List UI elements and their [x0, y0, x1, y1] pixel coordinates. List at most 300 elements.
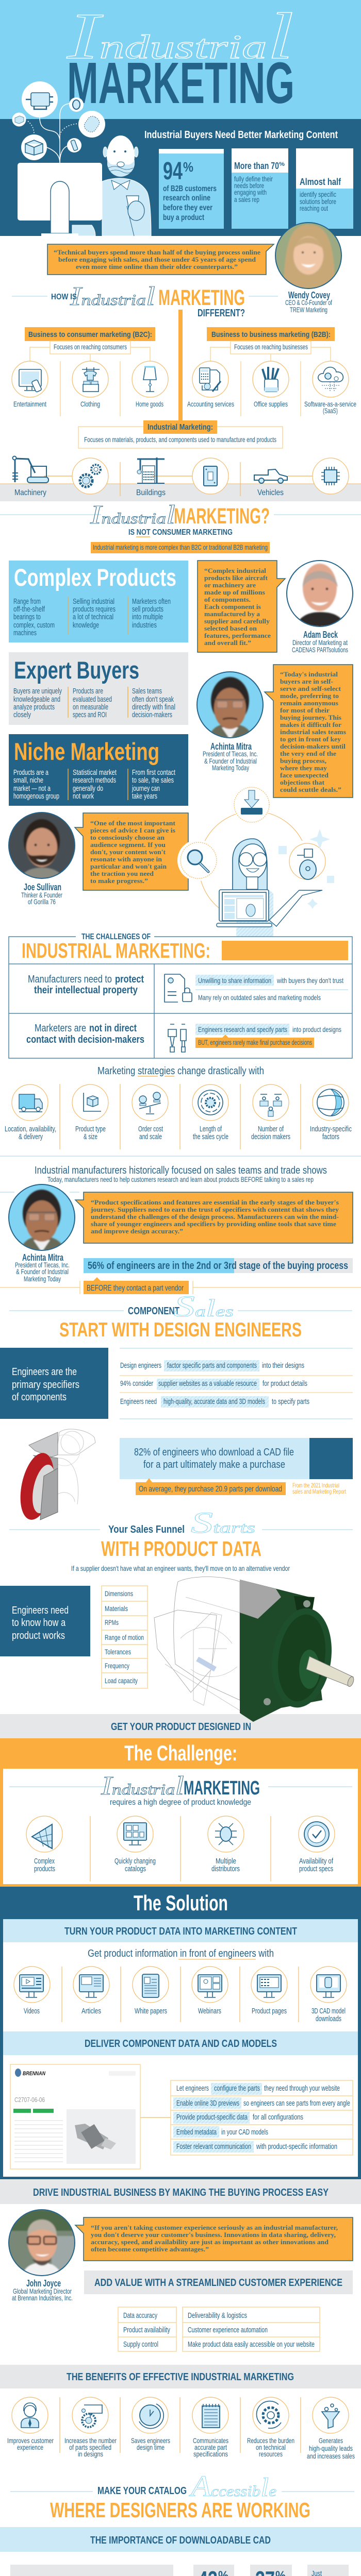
- screenshot: Brennan product page: BRENNAN: [23, 2071, 46, 2077]
- quote: Achinta Mitra: face unexpected: [280, 771, 329, 779]
- icon: buildings: [136, 457, 166, 497]
- icon: accounting: [187, 361, 234, 408]
- panel: complex products: products requires: [73, 605, 116, 614]
- list: engineer facts: high-quality, accurate data and 3D models: [163, 1397, 265, 1406]
- list: deliver features: for all configurations: [253, 2113, 303, 2122]
- heading: component sales start with design engineers: [9, 1290, 352, 1341]
- stat card: 94%: research online: [163, 194, 210, 202]
- band: get your product designed in: GET YOUR PRODUCT DESIGNED IN: [111, 1721, 251, 1733]
- stat: 82% of engineers: for a part ultimately make a purchase: [143, 1459, 285, 1470]
- caption: Achinta Mitra: Marketing Today: [212, 764, 249, 772]
- list: product specifications: [102, 1586, 147, 1688]
- caption: Achinta Mitra second: & Founder of Industrial: [16, 1267, 69, 1276]
- quote: Wendy Covey: before engaging with sales, and those under 45 years of age spend: [58, 256, 256, 263]
- icon: improves customer experience: [7, 2397, 54, 2451]
- quote: Achinta Mitra: buyers are in self-: [280, 677, 333, 685]
- icon: articles: [73, 1967, 109, 2015]
- icon: machinery: Machinery: [14, 488, 46, 497]
- caption: Wendy Covey: CEO & Co-Founder of: [285, 298, 332, 307]
- quote: Adam Beck: [198, 561, 285, 652]
- quote: John Joyce: you don't deserve your customer's business. Innovations in data sharing, delivery,: [91, 2231, 336, 2239]
- panel: B2C: Focuses on reaching consumers: [54, 343, 127, 351]
- panel: complex products: machines: [13, 629, 37, 637]
- panel: challenges of industrial marketing: [9, 933, 352, 1058]
- panel: the challenge: Availability of: [299, 1857, 334, 1866]
- quote: Achinta Mitra: makes it difficult for: [280, 721, 341, 728]
- icon: software as a service: [304, 361, 356, 415]
- caption: Achinta Mitra: [203, 741, 258, 772]
- panel: complex products: [9, 561, 188, 642]
- icon: increases parts specified: Increases the number: [64, 2436, 117, 2445]
- panel: the challenge: products: [34, 1865, 55, 1873]
- panel: the challenge: requires a high degree of product knowledge: [110, 1798, 251, 1807]
- heading: component sales start with design engineers: S ales: [174, 1290, 234, 1323]
- caption: John Joyce: John Joyce: [26, 2278, 61, 2289]
- band: the benefits: [0, 2365, 361, 2453]
- quote: Achinta Mitra second: [75, 1192, 353, 1243]
- callout: more complex: [91, 542, 270, 553]
- caption: Joe Sullivan: Joe Sullivan: [24, 882, 61, 892]
- icon: home goods: [132, 361, 168, 408]
- stat bar: 20%: [307, 2565, 349, 2576]
- quote: Achinta Mitra: buying process,: [280, 757, 326, 765]
- panel: expert buyers: Expert Buyers: [14, 656, 139, 684]
- stat card: almost half: Almost half: [300, 177, 341, 187]
- panel: challenges of industrial marketing: not in direct: [89, 1023, 137, 1034]
- icon: improves customer experience: Improves customer: [7, 2436, 54, 2445]
- list: deliver features: [171, 2080, 353, 2155]
- icon: office supplies: Office supplies: [254, 400, 288, 408]
- icon: entertainment: Entertainment: [13, 400, 46, 408]
- quote: John Joyce: “If you aren't taking customer experience seriously as an industrial manufacturer,: [91, 2224, 338, 2231]
- quote: Achinta Mitra second: understand the challenges of the design process. Manufacturers can win the mind-: [91, 1213, 339, 1221]
- panel: expert buyers: closely: [13, 710, 31, 719]
- quote: Wendy Covey: “Technical buyers spend more than half of the buying process online: [54, 248, 260, 256]
- panel: complex products: off-the-shelf: [13, 605, 45, 614]
- icon: product type and size: & size: [84, 1132, 97, 1141]
- list: deliver features: Let engineers: [176, 2084, 209, 2093]
- icon: decision makers: decision makers: [251, 1132, 290, 1141]
- icon: gears: [72, 458, 108, 494]
- panel: B2C: [25, 327, 155, 416]
- quote: Achinta Mitra second: journey. Suppliers need to earn the trust of specifiers with content that shows they: [90, 1206, 339, 1213]
- icon: order cost and scale: Order cost: [138, 1125, 163, 1133]
- panel: complex products: Marketers often: [132, 597, 171, 606]
- panel: expert buyers: on measurable: [73, 703, 108, 711]
- icon: industry-specific: [310, 1084, 352, 1141]
- icon: improves customer experience: experience: [17, 2443, 43, 2451]
- caption: Wendy Covey: Wendy Covey: [288, 290, 330, 300]
- panel: challenges of industrial marketing: THE CHALLENGES OF: [81, 933, 151, 941]
- icon: product type and size: [72, 1084, 108, 1141]
- list: engineer facts: Design engineers: [120, 1361, 161, 1370]
- heading: make your catalog accessible: MAKE YOUR CATALOG: [97, 2485, 187, 2497]
- text: historical focus: [35, 1165, 327, 1183]
- panel: expert buyers: Buyers are uniquely: [13, 687, 62, 696]
- list: deliver features: Embed metadata: [176, 2128, 217, 2137]
- panel: the challenge: Industria l: [101, 1771, 184, 1801]
- stat card: almost half: solutions before: [300, 197, 336, 206]
- icon: generates leads: [307, 2397, 355, 2460]
- list: product specifications: Tolerances: [105, 1648, 131, 1656]
- icon: communicates specifications: specifications: [193, 2450, 228, 2458]
- panel: expert buyers: analyze products: [13, 703, 55, 711]
- panel: B2B: Business to business marketing (B2B):: [211, 330, 331, 339]
- heading: How is Industrial Marketing different: HOW IS: [51, 293, 77, 301]
- icon: clothing: [72, 361, 108, 408]
- divider line: [0, 1156, 361, 1157]
- panel: niche marketing: generally do: [73, 784, 103, 793]
- caption: Adam Beck: [292, 630, 348, 654]
- caption: Joe Sullivan: Thinker & Founder: [21, 891, 62, 899]
- stat card: more than 70%: [232, 148, 288, 229]
- stat: 82% of engineers: 82% of engineers who download a CAD file: [134, 1447, 294, 1458]
- icon: communicates specifications: Communicates: [193, 2436, 228, 2445]
- heading: your sales funnel starts with product data: S tarts: [191, 1506, 255, 1539]
- stat card: more than 70%: %: [279, 161, 285, 167]
- stat card: 94%: buy a product: [163, 213, 205, 222]
- screenshot: Brennan product page: C2707-06-06: [14, 2096, 45, 2104]
- panel: expert buyers: directly with final: [132, 703, 175, 711]
- caption: Achinta Mitra: & Founder of Industrial: [204, 757, 257, 765]
- panel: niche marketing: From first contact: [132, 768, 176, 777]
- band: add value: [84, 2270, 353, 2294]
- panel: niche marketing: Statistical market: [73, 768, 117, 777]
- caption: Achinta Mitra: Achinta Mitra: [210, 741, 252, 752]
- panel: engineers need to know how a product works: to know how a: [12, 1617, 66, 1629]
- panel: niche marketing: journey can: [132, 784, 160, 793]
- panel: industrial marketing definition: [78, 420, 283, 448]
- list: deliver features: Provide product-specific data: [176, 2113, 248, 2122]
- panel: the challenge: Quickly changing: [114, 1857, 156, 1866]
- icon: order cost and scale: and scale: [139, 1132, 162, 1141]
- panel: expert buyers: evaluated based: [73, 695, 112, 704]
- list: product specifications: Range of motion: [105, 1633, 144, 1641]
- icon: chip: [313, 458, 349, 494]
- photo: Achinta Mitra second: [0, 1184, 79, 1255]
- illustration: woman with laptop and catalog icons: [177, 786, 334, 937]
- quote: Joe Sullivan: to make progress.”: [90, 877, 148, 885]
- list: product specifications: RPMs: [105, 1618, 119, 1626]
- illustration: man at computer with part icons: [12, 81, 151, 236]
- icon: entertainment: [12, 361, 48, 408]
- panel: challenges of industrial marketing: contact with decision-makers: [26, 1034, 144, 1045]
- stat card: 94%: of B2B customers: [163, 184, 217, 193]
- icon: order cost and scale: [132, 1084, 168, 1141]
- panel: the challenge: The Challenge:: [124, 1741, 237, 1765]
- caption: Achinta Mitra second: [15, 1252, 70, 1283]
- heading: component sales start with design engineers: COMPONENT: [128, 1306, 179, 1317]
- panel: engineers need to know how a product works: Engineers need: [12, 1605, 69, 1616]
- stat card: almost half: reaching out: [300, 204, 328, 212]
- list: engineer facts: supplier websites as a valuable resource: [158, 1379, 257, 1388]
- icon: videos: [14, 1967, 50, 2015]
- icon: communicates specifications: accurate part: [194, 2443, 227, 2451]
- band: importance of downloadable CAD: [0, 2527, 361, 2552]
- icon: webinars: [192, 1967, 228, 2015]
- icon: accounting: Accounting services: [187, 400, 234, 408]
- table: customer experience: Supply control: [123, 2340, 158, 2349]
- quote: Joe Sullivan: [75, 813, 188, 890]
- icon: product type and size: Product type: [75, 1125, 106, 1133]
- icon: office supplies: [253, 361, 289, 408]
- panel: niche marketing: take years: [132, 792, 157, 801]
- panel: the solution background: [0, 1887, 361, 2179]
- stat card: almost half: [296, 148, 353, 229]
- quote: Wendy Covey: even more time online than their older counterparts.”: [76, 263, 238, 270]
- panel: expert buyers: knowledgeable and: [13, 695, 60, 704]
- photo: John Joyce: [9, 2210, 75, 2277]
- icon: location and delivery: [5, 1084, 56, 1141]
- quote: Achinta Mitra: to get in front of key: [280, 735, 341, 743]
- quote: Joe Sullivan: “One of the most important: [90, 819, 176, 827]
- quote: Adam Beck: features, performance: [204, 632, 271, 639]
- grey band: [0, 462, 361, 501]
- stat card: more than 70%: a sales rep: [234, 195, 259, 204]
- panel: B2C: Business to consumer marketing (B2C):: [28, 330, 152, 339]
- panel: challenges of industrial marketing: with buyers they don't trust: [276, 976, 343, 985]
- band: importance of downloadable CAD: THE IMPORTANCE OF DOWNLOADABLE CAD: [90, 2535, 271, 2546]
- screenshot: Brennan product page: [10, 2064, 171, 2169]
- icon: location and delivery: Location, availability,: [5, 1125, 56, 1133]
- heading: make your catalog accessible: Accessible: [189, 2469, 276, 2503]
- icon: decision makers: [251, 1084, 290, 1141]
- icon: home goods: Home goods: [136, 400, 163, 408]
- panel: complex products: a lot of technical: [73, 613, 113, 621]
- band: deliver component data and CAD models: [3, 2031, 358, 2055]
- list: deliver features: in your CAD models: [221, 2128, 268, 2137]
- stat card: almost half: identify specific: [300, 190, 336, 198]
- heading: marketing strategies: [60, 1065, 301, 1149]
- icon: industry-specific: factors: [322, 1132, 339, 1141]
- callout: more complex: Industrial marketing is more complex than B2C or traditional B2B marketing: [93, 543, 268, 551]
- orange vertical connector: [178, 310, 183, 421]
- icon: reduces burden on technical resources: [247, 2397, 294, 2458]
- heading: get product information in front of engineers: Get product information in front of engineers with: [88, 1948, 274, 1959]
- icon: communicates specifications: [192, 2397, 228, 2458]
- icon: vehicles: [254, 469, 287, 497]
- quote: Adam Beck: selected based on: [204, 624, 257, 632]
- stat card: more than 70%: needs before: [234, 181, 264, 190]
- panel: engineers need to know how a product works: product works: [12, 1630, 65, 1641]
- stat panel: 80%: [10, 2565, 173, 2576]
- stat bar: 43%: [193, 2565, 234, 2576]
- heading: Industrial Marketing is not consumer marketing: Industria l: [90, 500, 175, 530]
- band: drive industrial business: [0, 2180, 361, 2204]
- icon: location and delivery: & delivery: [19, 1132, 43, 1141]
- panel: challenges of industrial marketing: INDUSTRIAL MARKETING:: [22, 939, 210, 962]
- heading: your sales funnel starts with product data: Your Sales Funnel: [108, 1524, 185, 1535]
- quote: Joe Sullivan: to consciously choose an: [90, 834, 165, 841]
- panel: niche marketing: homogenous group: [13, 792, 59, 801]
- panel: challenges of industrial marketing: Many rely on outdated sales and marketing models: [198, 993, 321, 1002]
- caption: John Joyce: at Brennan Industries, Inc.: [12, 2294, 73, 2302]
- stat card: 94%: before they ever: [163, 204, 212, 212]
- icon: increases parts specified: of parts specified: [69, 2443, 111, 2451]
- caption: Achinta Mitra: President of Tiecas, Inc.: [203, 750, 258, 758]
- stat: 82% of engineers: On average, they purchase 20.9 parts per download: [139, 1485, 282, 1494]
- quote: John Joyce: often become competitive advantages.”: [91, 2245, 209, 2253]
- panel: industrial marketing definition: Industrial Marketing:: [147, 423, 213, 432]
- icon: length of sales cycle: Length of: [200, 1125, 222, 1133]
- quote: Achinta Mitra: industrial sales teams: [280, 728, 346, 736]
- quote: Achinta Mitra: serve and self-select: [280, 685, 341, 692]
- caption: Adam Beck: Adam Beck: [303, 630, 338, 640]
- photo: Joe Sullivan: [9, 812, 75, 881]
- icon: machinery: [12, 456, 48, 497]
- icon: switch plate: [192, 458, 228, 494]
- heading: Industrial Marketing is not consumer marketing: MARKETING?: [174, 504, 270, 529]
- caption: Joe Sullivan: [21, 882, 62, 906]
- icon: software as a service: (SaaS): [323, 406, 338, 415]
- band: deliver component data and CAD models: DELIVER COMPONENT DATA AND CAD MODELS: [85, 2038, 277, 2049]
- quote: Adam Beck: of components.: [204, 596, 251, 603]
- quote: Achinta Mitra: decision-makers until: [280, 742, 346, 750]
- table: customer experience: Data accuracy: [123, 2311, 157, 2320]
- quote: Achinta Mitra: buying journey. This: [280, 714, 341, 721]
- panel: expert buyers: Sales teams: [132, 687, 162, 696]
- panel: niche marketing: not work: [73, 792, 94, 801]
- list: engineer facts: Engineers need: [120, 1397, 157, 1406]
- image: motor CAD model: [154, 1577, 355, 1722]
- panel: niche marketing: [9, 734, 188, 806]
- stat card: 94%: [159, 149, 224, 229]
- quote: Joe Sullivan: the traction you need: [90, 870, 154, 877]
- quote: Joe Sullivan: particular and won't gain: [90, 862, 167, 870]
- panel: expert buyers: [9, 652, 188, 725]
- quote: John Joyce: accuracy, speed, and availability are just as important as other innovations and: [91, 2238, 329, 2246]
- quote: Adam Beck: products like aircraft: [204, 574, 268, 582]
- panel: expert buyers: Products are: [73, 687, 103, 696]
- panel: B2B: Focuses on reaching businesses: [234, 343, 308, 351]
- panel: challenges of industrial marketing: Unwilling to share information: [198, 976, 271, 985]
- heading: How is Industrial Marketing different: MARKETING: [158, 285, 245, 310]
- panel: the challenge: [0, 1738, 361, 1887]
- panel: complex products: Selling industrial: [73, 597, 114, 606]
- stat card: more than 70%: engaging with: [234, 188, 267, 196]
- icon: length of sales cycle: [192, 1084, 228, 1141]
- list: engineer facts: into their designs: [262, 1361, 304, 1370]
- icon: white papers: [133, 1967, 169, 2015]
- panel: the challenge: product specs: [299, 1865, 333, 1873]
- panel: complex products: complex, custom: [13, 621, 55, 630]
- photo: Achinta Mitra: [197, 672, 263, 742]
- panel: B2B: [207, 327, 335, 416]
- list: deliver features: configure the parts: [214, 2084, 260, 2093]
- icon: increases parts specified: [64, 2397, 117, 2458]
- quote: Adam Beck: manufactured by a: [204, 610, 260, 618]
- panel: niche marketing: market — not a: [13, 784, 51, 793]
- icon: webinars: Webinars: [198, 2007, 221, 2015]
- quote: Joe Sullivan: pieces of advice I can give is: [90, 826, 175, 834]
- quote: Achinta Mitra: objections that: [280, 778, 325, 786]
- quote: Adam Beck: Each component is: [204, 603, 261, 611]
- heading: Industrial Marketing is not consumer marketing: [0, 500, 361, 537]
- icon: saves design time: design time: [137, 2443, 165, 2451]
- panel: challenges of industrial marketing: Marketers are: [35, 1023, 86, 1034]
- quote: Achinta Mitra second: and improve design accuracy.”: [91, 1227, 183, 1235]
- caption: Achinta Mitra second: Marketing Today: [24, 1275, 61, 1283]
- icon: white papers: White papers: [135, 2007, 167, 2015]
- panel: niche marketing: to sale, the sales: [132, 776, 174, 785]
- panel: complex products: Complex Products: [14, 564, 176, 591]
- quote: Achinta Mitra: the very end of the: [280, 750, 336, 757]
- icon: reduces burden on technical resources: on technical: [256, 2443, 286, 2451]
- icon: decision makers: Number of: [258, 1125, 284, 1133]
- table: customer experience: Product availability: [123, 2326, 170, 2334]
- list: engineer facts: to specify parts: [272, 1397, 309, 1406]
- icon: reduces burden on technical resources: resources: [259, 2450, 283, 2458]
- stat bar: 37%: [250, 2565, 292, 2576]
- panel: complex products: sell products: [132, 605, 163, 614]
- callout: before they contact a part vendor: BEFORE they contact a part vendor: [87, 1284, 184, 1293]
- panel: complex products: industries: [132, 621, 157, 630]
- quote: Achinta Mitra: could scuttle deals.”: [280, 786, 341, 793]
- callout: before they contact a part vendor: [0, 1277, 361, 1294]
- quote: Achinta Mitra: for most of their: [280, 706, 330, 714]
- list: deliver features: Enable online 3D previews: [176, 2099, 239, 2108]
- panel: niche marketing: Products are a: [13, 768, 48, 777]
- icon: buildings: Buildings: [136, 488, 166, 497]
- quote: Adam Beck: or machinery are: [204, 581, 256, 589]
- hero background: dark band: [0, 119, 361, 236]
- panel: complex products: knowledge: [73, 621, 99, 630]
- image: caster CAD model: [15, 1429, 95, 1523]
- list: engineer facts: 94% consider: [120, 1379, 153, 1388]
- panel: complex products: Range from: [13, 597, 41, 606]
- icon: articles: Articles: [81, 2007, 101, 2015]
- list: engineer facts: [120, 1348, 353, 1419]
- heading: your sales funnel starts with product data: If a supplier doesn't have what an engineer wants, they'll move on to an alternative vendor: [71, 1564, 290, 1572]
- icon: generates leads: Generates: [319, 2436, 343, 2445]
- icon: saves design time: Saves engineers: [131, 2436, 170, 2445]
- icon: videos: Videos: [24, 2007, 40, 2015]
- panel: engineers are the primary specifiers: Engineers are the: [12, 1366, 77, 1378]
- heading: How is Industrial Marketing different: [12, 282, 278, 319]
- quote: Joe Sullivan: resonate with anyone in: [90, 855, 162, 863]
- quote: Joe Sullivan: don't, your content won't: [90, 848, 166, 856]
- panel: challenges of industrial marketing: protect: [115, 974, 144, 985]
- heading: make your catalog accessible: [10, 2469, 354, 2522]
- quote: Wendy Covey: [47, 244, 274, 275]
- table: customer experience: [118, 2307, 320, 2351]
- quote: Adam Beck: supplier and carefully: [204, 617, 270, 625]
- stat card: 94%: %: [183, 159, 193, 175]
- quote: Achinta Mitra: mode, preferring to: [280, 692, 339, 700]
- panel: the challenge: MARKETING: [184, 1777, 260, 1799]
- band: the benefits: THE BENEFITS OF EFFECTIVE INDUSTRIAL MARKETING: [67, 2371, 294, 2383]
- table: customer experience: Customer experience automation: [188, 2326, 268, 2334]
- band: get your product designed in: [0, 1714, 361, 1738]
- icon: vehicles: Vehicles: [257, 488, 284, 497]
- heading: How is Industrial Marketing different: DIFFERENT?: [198, 308, 245, 319]
- panel: niche marketing: small, niche: [13, 776, 43, 785]
- stat card: more than 70%: fully define their: [234, 175, 273, 183]
- stat: 82% of engineers: [120, 1438, 353, 1495]
- quote: Adam Beck: and overall fit.”: [204, 639, 251, 647]
- panel: engineers are the primary specifiers: of components: [12, 1392, 67, 1403]
- photo: Wendy Covey: [275, 223, 341, 289]
- quote: Joe Sullivan: audience segment. If you: [90, 841, 166, 849]
- quote: Adam Beck: “Complex industrial: [204, 567, 266, 574]
- list: product specifications: Dimensions: [105, 1589, 133, 1598]
- icon: product pages: Product pages: [252, 2007, 287, 2015]
- heading: marketing strategies: Marketing strategies change drastically with: [97, 1065, 264, 1077]
- quote: John Joyce: [75, 2217, 353, 2261]
- heading: How is Industrial Marketing different: Industria l: [70, 282, 155, 311]
- list: product specifications: Frequency: [105, 1662, 129, 1670]
- quote: Achinta Mitra second: “Product specifications and features are essential in the early stages of the buyer's: [91, 1198, 339, 1206]
